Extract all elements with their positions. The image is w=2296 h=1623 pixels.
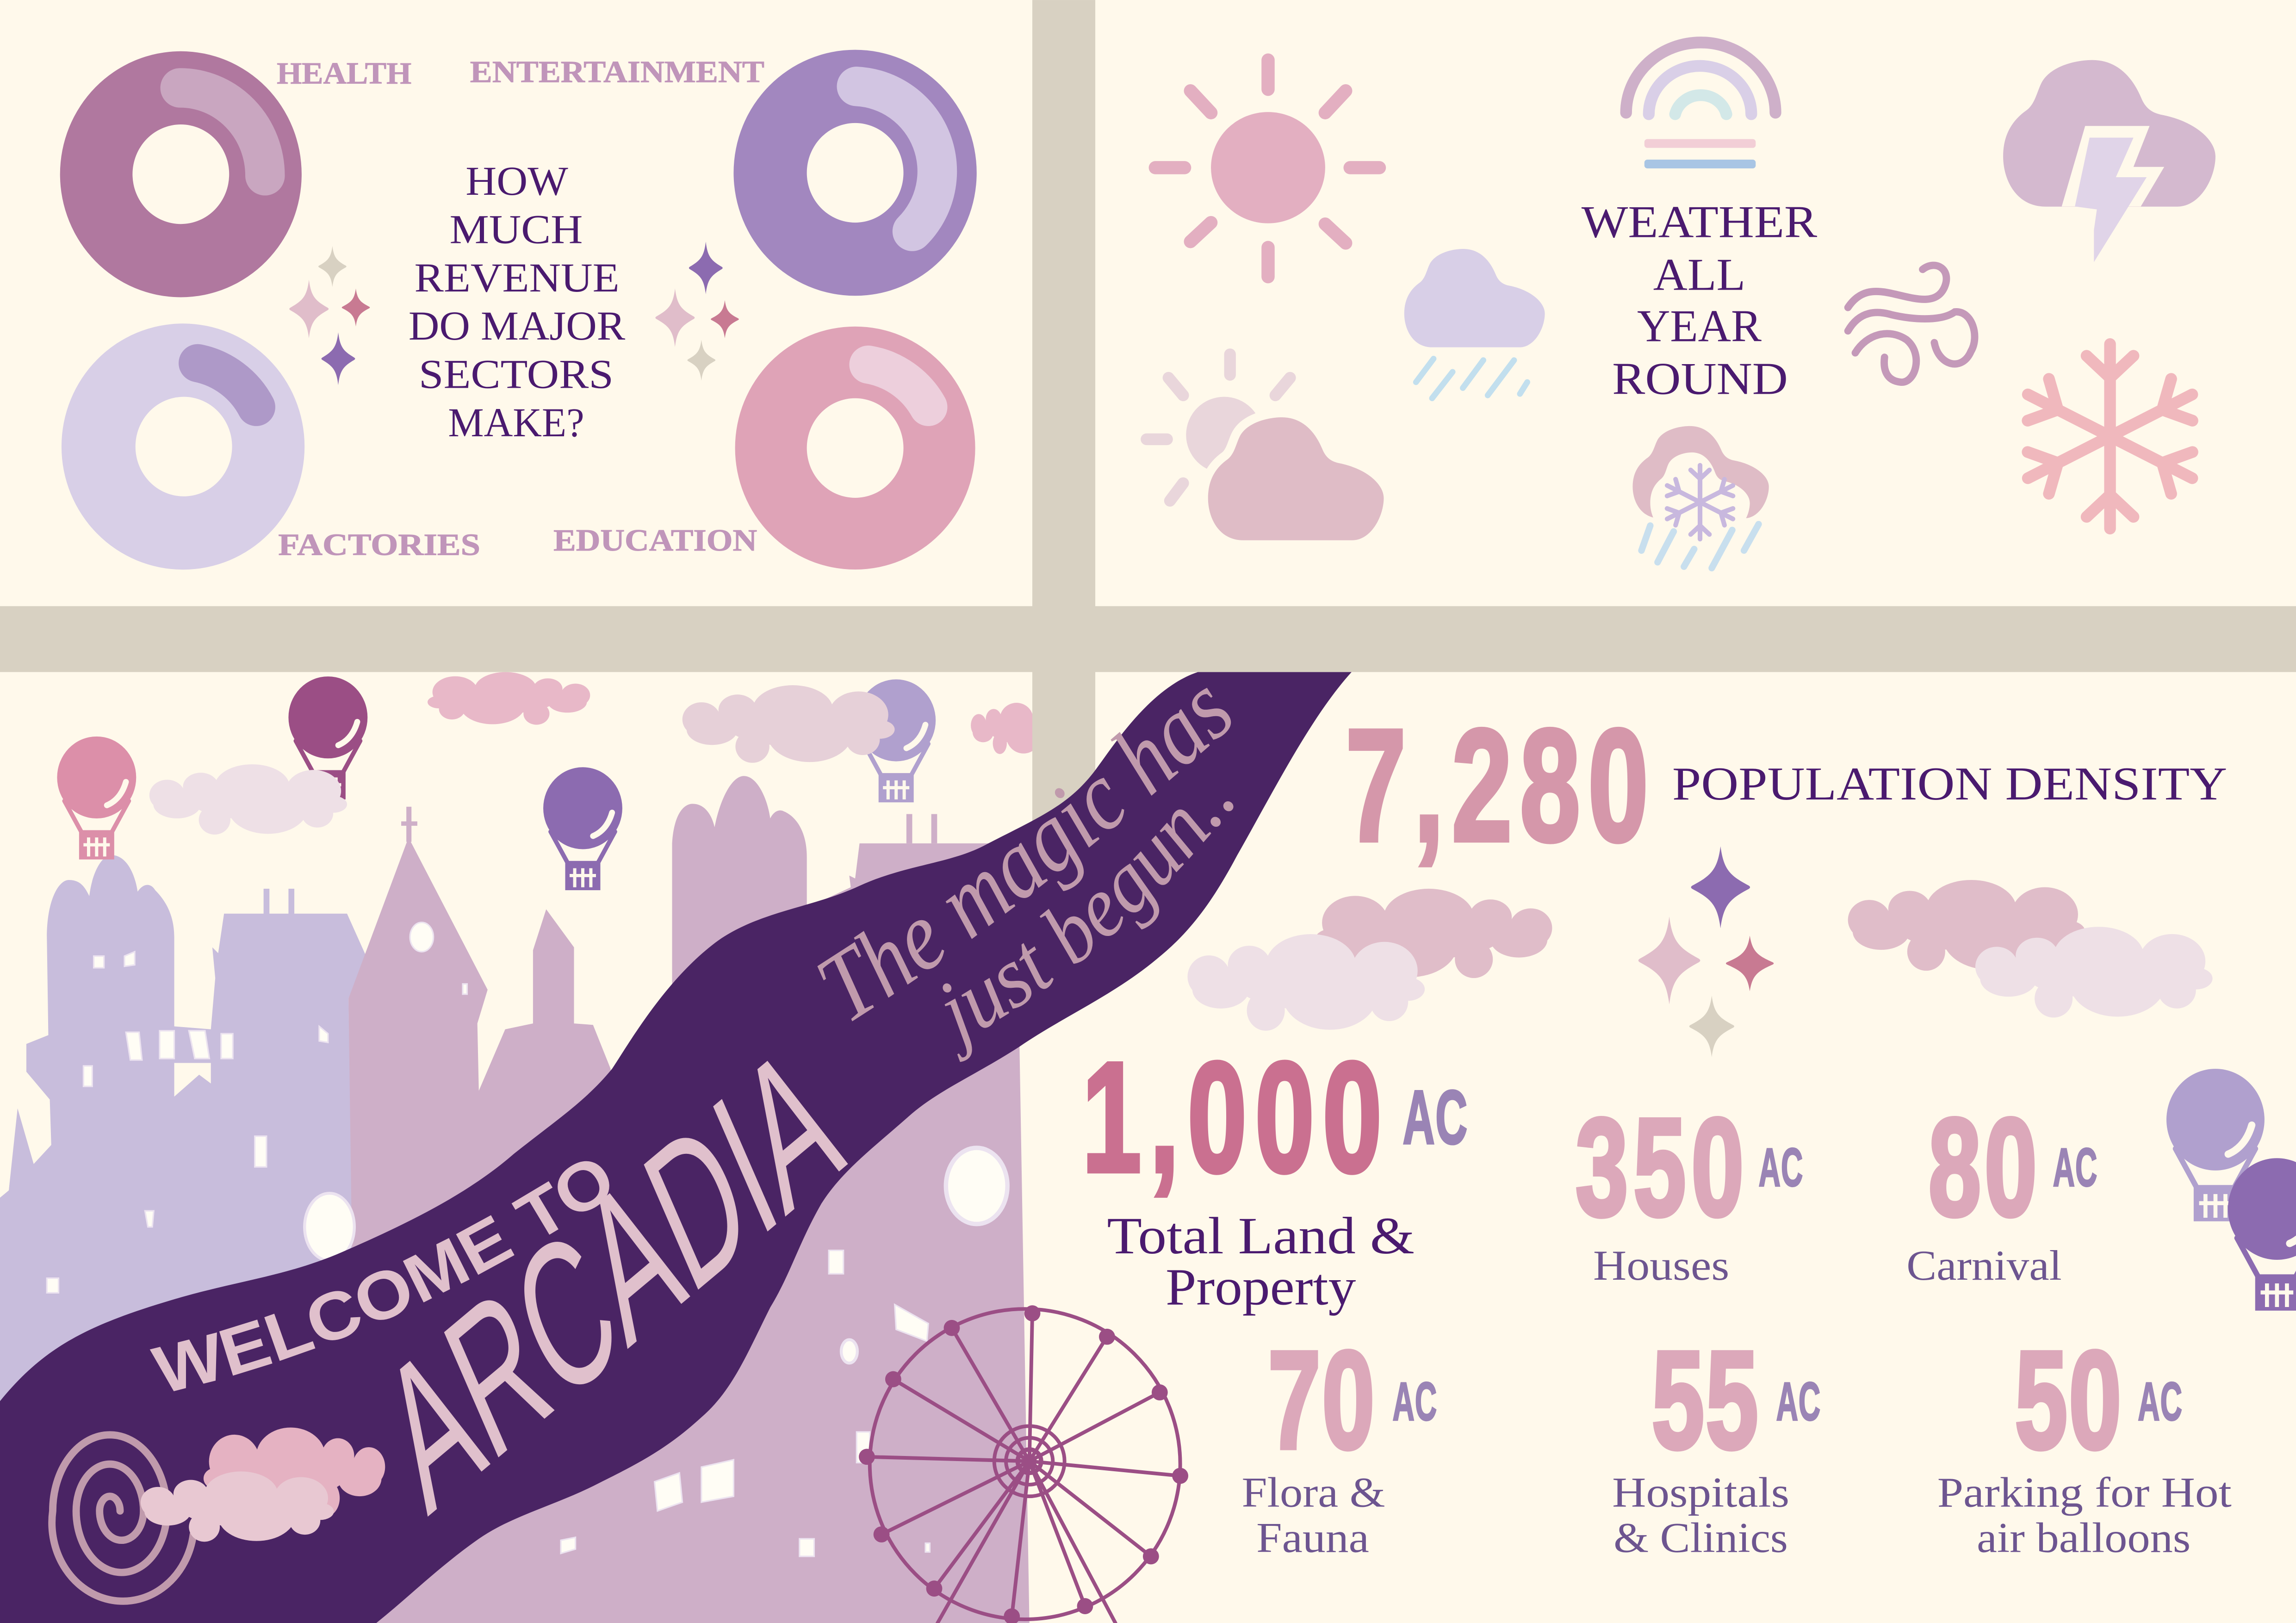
label: health: HEALTH [277,56,411,90]
cloud: pink at column [971,703,1059,754]
heading: weather all year round: ROUND [1612,354,1788,404]
cloud: pink top [428,672,590,725]
cloud: dusty top [683,685,895,763]
icon: rainbow [1626,43,1775,168]
label: entertainment: ENTERTAINMENT [470,55,764,89]
label: factories: FACTORIES [278,528,480,562]
stat: carnival [1906,1090,2097,1289]
cloud: ribbon pale [141,1471,334,1542]
heading: how much revenue: SECTORS [419,352,614,397]
panel: revenue [60,50,977,570]
stat: total land: 1,000 [1082,1030,1382,1205]
balloon: lilac [856,679,936,802]
donut: health [60,51,302,297]
heading: weather all year round: WEATHER [1582,198,1818,248]
stat: total land: Total Land & [1107,1206,1415,1265]
banner ribbon [0,672,1352,1623]
stat: total land: Property [1166,1258,1356,1316]
heading: weather all year round: ALL [1653,250,1745,300]
stat: houses: 350 [1576,1090,1744,1245]
icon: thunder cloud [2003,60,2215,262]
cloud: ribbon pink [204,1427,385,1517]
icon: rain cloud [1404,249,1545,398]
stat: hospitals and clinics: 55 [1652,1322,1758,1478]
stat: parking: AC [2138,1372,2182,1432]
stat: hospitals and clinics: & Clinics [1613,1514,1788,1561]
sparkles: center [1638,846,1774,1057]
heading: how much revenue: DO MAJOR [409,304,625,349]
cloud: pale over scene [149,764,347,835]
stat: population density [1346,696,2227,874]
donut: factories [62,323,304,570]
skyline: lavender castle [0,855,366,1622]
ferris wheel [859,1305,1188,1623]
stat: carnival: 80 [1929,1090,2037,1245]
balloon: violet [543,767,622,890]
stat: flora and fauna: 70 [1268,1322,1375,1478]
ribbon text: Arcadia: ARCADIA [356,999,865,1555]
stat: houses: AC [1759,1137,1803,1198]
icon: wind [1848,266,1975,382]
label: education: EDUCATION [553,524,757,558]
sparkles: right [655,242,739,381]
donut: education [735,327,975,570]
stat: carnival: Carnival [1906,1242,2062,1289]
sparkles: left [289,246,370,385]
balloon: plum [288,676,367,799]
stat: flora and fauna: Flora & [1242,1468,1385,1516]
stat: population density: POPULATION DENSITY [1672,758,2227,810]
heading: how much revenue: MUCH [450,207,583,252]
icon: snow cloud [1632,426,1769,568]
cloud: right lower two [1975,927,2213,1017]
heading: weather all year round [1582,198,1818,404]
cloud: right lower one [1187,934,1425,1031]
stat: houses [1576,1090,1803,1289]
building windows [47,923,1007,1556]
stat: parking: Parking for Hot [1937,1468,2232,1516]
stat: parking: air balloons [1977,1514,2191,1561]
cloud: right upper two [1848,880,2085,971]
balloon: right violet [2228,1158,2296,1311]
stat: parking [1937,1322,2232,1561]
heading: how much revenue [409,159,625,446]
ribbon text: welcome to: WELCOME TO [146,1139,628,1408]
heading: weather all year round: YEAR [1637,301,1762,351]
stat: flora and fauna: Fauna [1256,1514,1369,1561]
balloon: rose [57,737,136,860]
heading: how much revenue: REVENUE [415,255,620,301]
heading: how much revenue: HOW [465,159,568,204]
stat: hospitals and clinics: Hospitals [1612,1468,1789,1516]
stat: flora and fauna: AC [1392,1372,1437,1432]
stat: carnival: AC [2053,1137,2097,1198]
panel: city scene [0,776,1030,1623]
balloon: right lilac [2166,1069,2265,1221]
panel: weather [1147,43,2215,568]
icon: sun [1155,60,1379,277]
stat: parking: 50 [2015,1322,2122,1478]
heading: how much revenue: MAKE? [448,400,584,446]
stat: total land [1082,1030,1467,1316]
structure: beige window frame [0,0,2296,879]
donut: entertainment [733,50,977,296]
ribbon scroll spiral [52,1435,193,1601]
ribbon text: just begun: just begun.. [913,751,1254,1064]
stat: houses: Houses [1593,1242,1729,1289]
skyline: mauve church towers [348,776,1030,1623]
panel: statistics [1082,696,2296,1561]
cloud: right upper one [1315,889,1552,978]
stat: hospitals and clinics: AC [1776,1372,1820,1432]
stat: total land: AC [1403,1074,1467,1160]
stat: population density: 7,280 [1346,696,1648,874]
icon: snowflake [2017,344,2203,528]
stat: flora and fauna [1242,1322,1437,1561]
ribbon text: the magic has: The magic has [798,653,1253,1044]
stat: hospitals and clinics [1612,1322,1820,1561]
icon: sun behind cloud [1147,354,1384,540]
